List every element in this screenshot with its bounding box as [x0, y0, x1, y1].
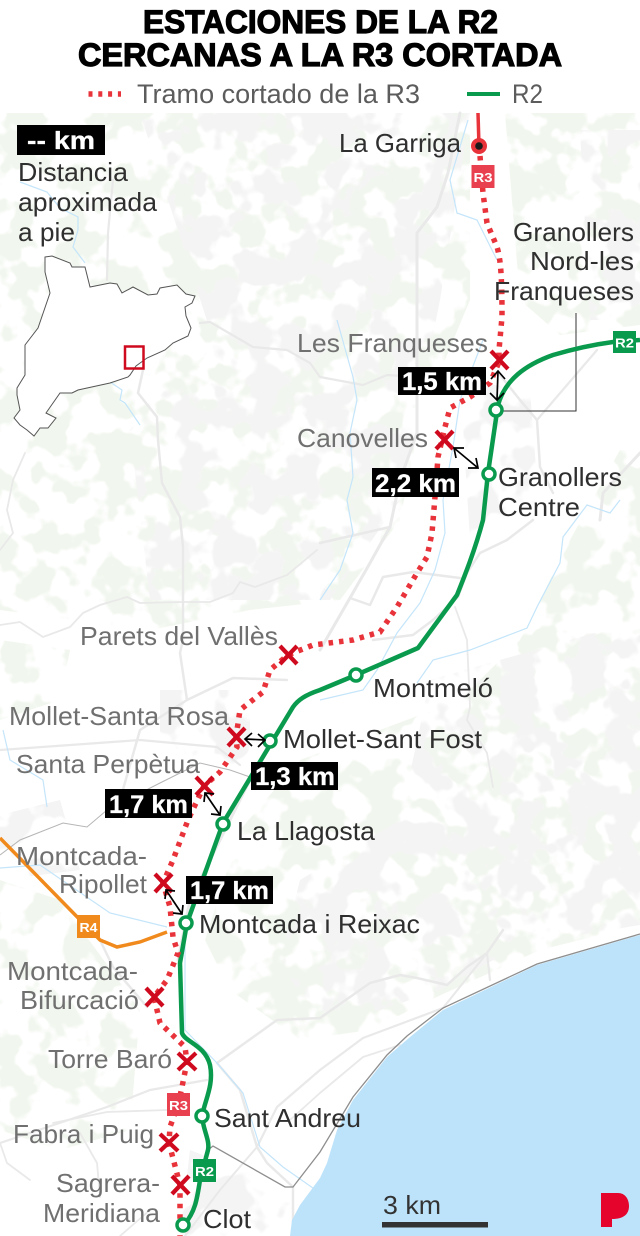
badge: R4: R4 — [80, 920, 98, 935]
label: Montcada-Bifurcació: Montcada- — [7, 956, 138, 986]
badge: R4 — [77, 915, 100, 938]
station: La Garriga — [471, 138, 487, 154]
distance: 1,7 km left: 1,7 km — [109, 791, 188, 819]
distance: 1,5 km: 1,5 km — [402, 368, 482, 396]
R2 stations: white circles — [177, 404, 502, 1231]
badge: R3 bottom — [167, 1093, 190, 1116]
label: Montcada-Bifurcació: Bifurcació — [20, 985, 139, 1015]
badge: R3 bottom: R3 — [169, 1098, 188, 1113]
line R2 — [180, 340, 640, 1225]
label: Torre Baró: Torre Baró — [48, 1044, 172, 1074]
thin grey boundary road — [0, 763, 250, 855]
title: CERCANAS A LA R3 CORTADA — [78, 37, 562, 73]
label: Granollers Nord-les Franqueses: Franqueses — [494, 276, 634, 306]
label: Montcada i Reixac: Montcada i Reixac — [199, 909, 420, 939]
label: Mollet-Santa Rosa: Mollet-Santa Rosa — [9, 701, 230, 731]
label: Granollers Nord-les Franqueses: Granollers — [513, 217, 634, 247]
distance: 1,7 km right: 1,7 km — [190, 877, 269, 905]
legend — [88, 79, 543, 109]
label: Canovelles: Canovelles — [297, 423, 428, 453]
label: Granollers Centre — [498, 462, 622, 522]
label: La Llagosta: La Llagosta — [237, 816, 376, 846]
badge: R3 top: R3 — [474, 170, 492, 185]
label: Montcada-Bifurcació — [7, 956, 139, 1015]
distance: 2,2 km: 2,2 km — [375, 470, 456, 498]
label: Sagrera-Meridiana: Meridiana — [43, 1198, 161, 1228]
label: Montmeló: Montmeló — [373, 673, 493, 703]
badge: R2 bottom — [193, 1159, 216, 1182]
label: Sagrera-Meridiana: Sagrera- — [56, 1168, 160, 1198]
label: Granollers Nord-les Franqueses — [494, 217, 634, 306]
locator: red area rectangle — [125, 346, 144, 368]
badge: R3 top — [472, 165, 494, 188]
label: Santa Perpètua: Santa Perpètua — [16, 749, 201, 779]
legend: red dotted line — [88, 91, 121, 97]
line R3: open section — [471, 113, 487, 154]
walking-distance arrows — [165, 371, 505, 914]
badge: R2 right: R2 — [615, 336, 634, 350]
label: La Garriga: La Garriga — [339, 128, 462, 158]
key: description: aproximada — [18, 187, 158, 217]
locator map of Catalonia — [14, 256, 195, 436]
label: Parets del Vallès: Parets del Vallès — [80, 621, 278, 651]
R3 stations: red crosses — [146, 351, 508, 1194]
label: Sagrera-Meridiana — [43, 1168, 161, 1228]
label: Montcada-Ripollet — [16, 841, 148, 899]
legend: green line — [467, 92, 500, 96]
title: ESTACIONES DE LA R2 — [143, 4, 498, 40]
label: Mollet-Sant Fost: Mollet-Sant Fost — [283, 724, 483, 754]
key: description: Distancia — [18, 157, 129, 187]
distance key — [17, 125, 158, 247]
coast line — [208, 934, 640, 1187]
label: Granollers Nord-les Franqueses: Nord-les — [530, 246, 634, 276]
scale bar — [382, 1190, 488, 1228]
sea — [290, 935, 640, 1236]
title — [78, 4, 562, 73]
leader line: Granollers Nord — [500, 313, 576, 411]
badge: R2 bottom: R2 — [195, 1164, 214, 1179]
badge: R2 right — [613, 331, 636, 353]
label: Montcada-Ripollet: Ripollet — [59, 869, 148, 899]
key: description — [18, 157, 158, 247]
line R4 — [0, 838, 167, 947]
line R3: cut section — [154, 156, 502, 1236]
label: Sant Andreu: Sant Andreu — [214, 1103, 361, 1133]
label: Montcada-Ripollet: Montcada- — [16, 841, 147, 871]
key: black km box: -- km — [27, 127, 95, 155]
key: black km box — [17, 125, 105, 155]
distance labels — [105, 367, 486, 905]
label: Granollers Centre: Centre — [498, 492, 580, 522]
locator: territory outline — [14, 256, 195, 436]
label: Granollers Centre: Granollers — [498, 462, 622, 492]
distance: 1,3 km: 1,3 km — [255, 763, 335, 791]
label: Les Franqueses: Les Franqueses — [297, 328, 488, 358]
legend: R2 label: R2 — [512, 79, 543, 109]
scale bar: 3 km — [383, 1190, 441, 1220]
legend: cut R3 label: Tramo cortado de la R3 — [137, 79, 420, 109]
key: description: a pie — [18, 217, 75, 247]
label: Clot: Clot — [203, 1204, 252, 1234]
label: Fabra i Puig: Fabra i Puig — [13, 1119, 154, 1149]
publisher logo — [601, 1193, 629, 1227]
badges on lines — [167, 165, 636, 1182]
